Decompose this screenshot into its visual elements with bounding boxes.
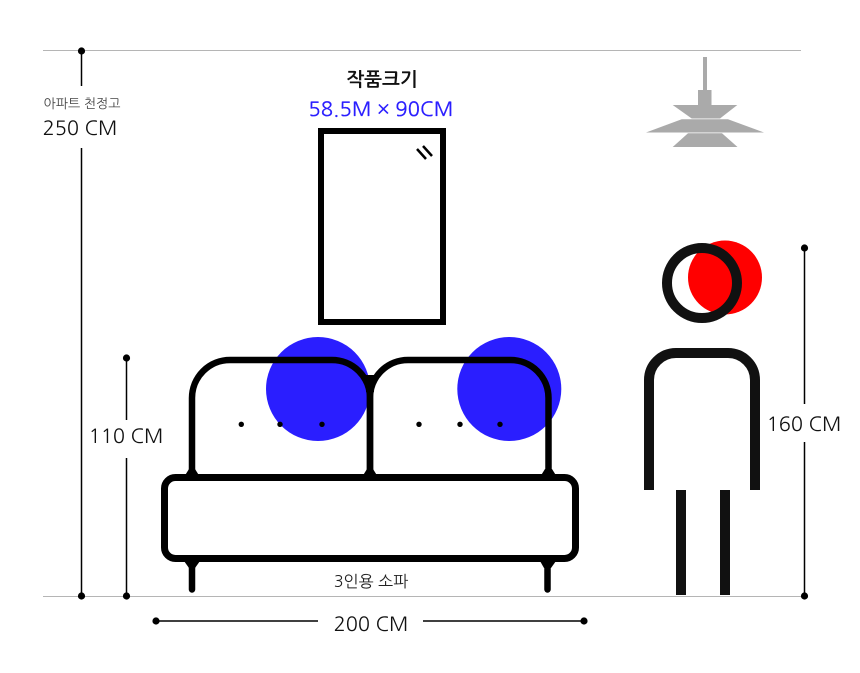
blue circle accents	[266, 337, 561, 441]
sofa	[164, 337, 576, 590]
person figure	[649, 240, 762, 595]
sofa legs	[192, 560, 548, 590]
dimension: person height 160 CM	[767, 244, 841, 600]
dimension: sofa width 200 CM	[152, 614, 588, 634]
artwork frame	[321, 131, 443, 322]
sofa label: 3인용 소파	[334, 573, 408, 590]
heading: artwork size: 58.5M × 90CM	[309, 99, 453, 119]
cushion joints	[184, 469, 557, 477]
red circle accent	[688, 240, 762, 314]
legs	[676, 490, 730, 595]
heading: artwork size: 작품크기	[346, 70, 418, 89]
dimension: sofa height 110 CM: 110 CM	[89, 426, 163, 446]
dimension: person height 160 CM: 160 CM	[767, 414, 841, 434]
sofa seat	[164, 478, 576, 558]
leg joints	[184, 561, 556, 568]
pendant lamp	[646, 57, 764, 147]
dimension: ceiling height 250 CM: 250 CM	[43, 118, 117, 138]
heading: artwork size	[309, 70, 453, 119]
dimension: sofa height 110 CM	[89, 354, 163, 600]
dimension: sofa width 200 CM: 200 CM	[334, 614, 408, 634]
dimension: ceiling height 250 CM: 아파트 천정고	[44, 97, 120, 110]
body	[649, 353, 755, 490]
sofa back cushions	[192, 360, 548, 477]
dimension: ceiling height 250 CM	[43, 47, 120, 600]
head	[667, 248, 737, 318]
cushion buttons	[239, 422, 503, 427]
